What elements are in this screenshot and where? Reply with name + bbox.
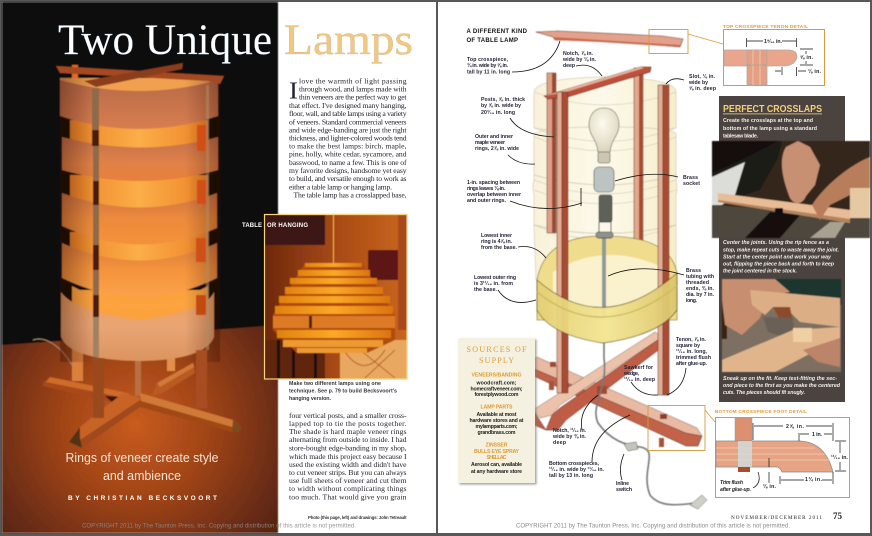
mortises (550, 362, 556, 367)
caption: Make two different lamps using one (289, 381, 381, 387)
panel: sources of supply: ZINSSER (486, 443, 508, 449)
detail: bottom crosspiece foot: 1¾ in. (805, 476, 823, 483)
drawing callouts: Inline (616, 481, 629, 487)
right page (438, 2, 870, 533)
panel: perfect crosslaps: ond piece to the first as you make the centered (723, 383, 841, 389)
panel: sources of supply: grandbrass.com (478, 430, 516, 436)
panel: perfect crosslaps: tablesaw blade. (723, 134, 759, 140)
base arm A (530, 337, 665, 430)
body text column 2: lapped top to tie the posts together. (289, 419, 407, 428)
drawing callouts: Notch, ⅞ in. (563, 51, 594, 57)
panel: perfect crosslaps: cuts. The pieces should fit snugly. (723, 390, 806, 396)
drawing callouts: Slot, ⅛ in. (689, 74, 716, 80)
top crosspiece (72, 65, 78, 80)
intro text column: and wide edge-banding are just the right (289, 126, 407, 134)
caption: hanging version. (289, 396, 332, 402)
intro text column: thin veneers are the perfect way to get (299, 92, 407, 102)
intro text column: to make the best lamps: birch, maple, (289, 142, 407, 150)
subtitle (66, 450, 218, 483)
detail: bottom crosspiece foot: 2⅝ in. (786, 424, 805, 430)
base cross (43, 377, 123, 402)
cord and plug (596, 343, 695, 505)
caption (289, 381, 397, 402)
body text column 2: four vertical posts, and a smaller cross- (289, 411, 407, 420)
drawing callouts: trimmed flush (676, 355, 711, 361)
intro text column: my favorite designs, handsome yet easy (289, 166, 407, 175)
body text column 2: used the existing width and didn't have (289, 460, 407, 469)
body text column 2: alternating from outside to inside. I had (289, 435, 407, 444)
folio: NOVEMBER/DECEMBER 2011 (731, 515, 822, 521)
drawing callouts: switch (616, 487, 632, 493)
drawing callouts: dia. by 7 in. (686, 292, 715, 298)
panel: sources of supply (458, 338, 535, 483)
intro text column: through wood, and lamps made with (299, 84, 407, 94)
panel: sources of supply: mylampparts.com; (476, 424, 518, 430)
drawing callouts: Outer and inner (475, 134, 513, 140)
drawing callouts: long. (686, 298, 698, 304)
leader arrows (498, 41, 686, 480)
inset photo: hanging lamp (242, 214, 407, 379)
drawing callouts: threaded (686, 280, 709, 286)
exploded top crosspiece (536, 31, 683, 47)
drawing callouts: Brass (686, 268, 701, 274)
intro text column: The table lamp has a crosslapped base, (294, 190, 407, 200)
intro text column: basswood, to name a few. This is one of (289, 158, 407, 167)
panel: sources of supply: BULLS EYE SPRAY (474, 449, 520, 455)
photo credit: Photo (this page, left) and drawings: John Tetreault (308, 515, 407, 520)
panel: perfect crosslaps: stop, make repeat cuts to waste away the joint. (723, 248, 840, 254)
body text column 2: too much. That would give you grain (289, 492, 407, 502)
byline: BY CHRISTIAN BECKSVOORT (68, 495, 217, 502)
lamp glow interiors (70, 120, 208, 152)
title: Two Unique (58, 17, 272, 64)
inset photo: hanging lamp: OR HANGING (267, 223, 308, 229)
subtitle: and ambience (103, 468, 181, 483)
assembled top crosspiece (544, 67, 651, 99)
body text column 2: store-bought edge-banding in my shop, (289, 444, 407, 452)
detail: bottom crosspiece foot: ⅛ in. (763, 484, 777, 490)
drawing callouts: ends, ⅜ in. (686, 286, 715, 292)
panel: perfect crosslaps: PERFECT CROSSLAPS (723, 103, 822, 115)
intro text column: either a table lamp or hanging lamp. (289, 182, 392, 192)
drawing callouts: wedge, (623, 371, 640, 377)
panel: perfect crosslaps: Center the joints. Using the rip fence as a (723, 240, 829, 246)
detail: bottom crosspiece foot: ¹¹⁄₁₆ in. (831, 455, 849, 461)
panel: sources of supply: Aerosol can, available (471, 462, 522, 468)
drawing callouts: ¹¹⁄₁₆ in. deep (624, 377, 655, 383)
drawing callouts: ¾ in. wide by ⅝ in. (467, 62, 509, 69)
body text column 2: to cut veneer strips. But you can always (289, 468, 407, 477)
drawing callouts: Lowest outer ring (474, 275, 516, 281)
panel: sources of supply: SHELLAC (486, 455, 507, 461)
body text column 2: to width without complicating things (289, 484, 407, 493)
exploded lamp drawing (525, 31, 707, 509)
drawing callouts: Lowest inner (481, 233, 512, 239)
panel: sources of supply: at any hardware store (471, 469, 522, 475)
drawing callouts: wide by (688, 80, 708, 86)
crosspiece bars (56, 66, 224, 84)
heading: a different kind of table lamp: A DIFFERENT KIND (466, 29, 528, 35)
panel: sources of supply: forestplywood.com (474, 392, 519, 398)
body text column 2 (289, 411, 407, 502)
back legs (72, 345, 83, 381)
veneer rings (60, 80, 218, 129)
drawing callouts: rings, 2⅞ in. wide (475, 146, 519, 152)
drawing callouts: wide by ⅜ in. (552, 434, 587, 440)
intro text column: floor, wall, and table lamps using a variety (289, 109, 407, 118)
heading: a different kind of table lamp: OF TABLE LAMP (466, 38, 518, 44)
panel: perfect crosslaps: bottom of the lamp using a standard (723, 126, 817, 132)
panel: sources of supply: LAMP PARTS (480, 405, 513, 411)
inset label: TABLE (242, 223, 262, 229)
heading: a different kind of table lamp (466, 29, 528, 44)
copyright right: COPYRIGHT 2011 by The Taunton Press, Inc. Copying and distribution of this article is not permitted. (516, 524, 790, 530)
panel: sources of supply: woodcraft.com; (476, 380, 517, 386)
drawing callouts: tubing with (686, 274, 714, 280)
shade rings (533, 77, 677, 290)
copyright left: COPYRIGHT 2011 by The Taunton Press, Inc. Copying and distribution of this article is not permitted. (82, 524, 356, 530)
drawing callouts: ring is 4⅞ in. (481, 239, 513, 245)
photo: fitting the joint (722, 279, 841, 372)
panel: perfect crosslaps: the joint centered in the stock. (723, 268, 798, 274)
folio (731, 511, 842, 521)
drawing callouts: ⅝ in. deep (689, 86, 716, 92)
intro text column: that effect. I've designed many hanging, (289, 101, 407, 110)
intro text column: of veneers. Standard commercial veneers (289, 118, 407, 126)
drawing callouts (467, 51, 716, 493)
bulb (589, 108, 619, 163)
panel: perfect crosslaps: out, flipping the piece back and forth to keep (723, 262, 835, 268)
front posts (92, 88, 99, 132)
drawing callouts: deep (553, 440, 566, 446)
drawing callouts: deep (563, 63, 575, 69)
drawing callouts: 1-in. spacing between (467, 180, 520, 186)
caption: technique. See p. 79 to build Becksvoort's (289, 388, 397, 394)
drawing callouts: tall by 13 in. long (549, 473, 593, 479)
drawing callouts: ¹¹⁄₁₆ in. wide by ¹¹⁄₁₆ in. (549, 467, 605, 473)
intro text column: pine, holly, white cedar, sycamore, and (289, 150, 407, 158)
drawing callouts: maple veneer (475, 140, 505, 146)
front posts (557, 92, 562, 393)
drawing callouts: the base. (474, 287, 498, 293)
photo: hands at tablesaw (712, 141, 870, 238)
body text column 2: which made this project easy because I (289, 452, 407, 461)
photo: table lamp on table (2, 2, 278, 533)
drawing callouts: 20³⁄₁₆ in. long (481, 110, 515, 116)
drawing callouts: ¹¹⁄₁₆ in. long, (676, 349, 708, 355)
detail: bottom crosspiece foot: after glue-up. (720, 487, 751, 493)
intro text column: love the warmth of light passing (299, 76, 407, 86)
detail: bottom crosspiece foot: Trim flush (720, 480, 743, 486)
drawing callouts: Bottom crosspieces, (549, 461, 600, 467)
title (58, 17, 413, 64)
intro text column: thickness, and lighter-colored woods tend (289, 134, 407, 142)
lower inner ring (537, 236, 677, 320)
intro text column: to build, and versatile enough to work as (289, 174, 407, 183)
panel: sources of supply: Available at most (476, 412, 517, 418)
drawing callouts: wide by ⅛ in. (562, 57, 597, 63)
panel: sources of supply: SUPPLY (479, 356, 514, 365)
drawing callouts: square by (676, 343, 700, 349)
panel: perfect crosslaps (712, 96, 870, 402)
panel: sources of supply: SOURCES OF (466, 345, 527, 354)
drawing callouts: after glue-up. (676, 361, 708, 367)
drawing callouts: overlap between inner (467, 192, 521, 198)
detail: top crosspiece tenon (649, 24, 824, 86)
detail: top crosspiece tenon: 1⁹⁄₁₆ in. (764, 39, 783, 45)
detail: bottom crosspiece foot: BOTTOM CROSSPIECE FOOT DETAIL (715, 409, 807, 415)
detail: top crosspiece tenon: TOP CROSSPIECE TENON DETAIL (723, 24, 808, 30)
body text column 2: use full sheets of veneer and cut them (289, 476, 407, 485)
drawing callouts: socket (683, 181, 700, 187)
back posts (547, 73, 556, 233)
drawing callouts: rings leaves ⅛-in. (467, 186, 506, 192)
subtitle: Rings of veneer create style (66, 450, 218, 465)
detail: top crosspiece tenon: ⅝ in. (800, 55, 814, 61)
detail: top crosspiece tenon: ⅛ in. (808, 69, 822, 75)
base arm B (525, 365, 702, 446)
front yellow band (537, 273, 677, 343)
drawing callouts: Notch, ¹¹⁄₁₆ in. (553, 428, 587, 434)
drawing callouts: Tenon, ⅞ in. (676, 337, 707, 343)
panel: sources of supply: VENEERS/BANDING (472, 373, 522, 379)
drawing callouts: Sawkerf for (624, 365, 653, 371)
drawing callouts: from the base. (481, 245, 518, 251)
panel: sources of supply: hardware stores and at (470, 418, 524, 424)
left page (2, 2, 436, 533)
drawing callouts: by ⅝ in. wide by (481, 103, 521, 109)
detail: bottom crosspiece foot (648, 406, 850, 498)
drawing callouts: and outer rings. (467, 198, 507, 204)
folio: 75 (833, 511, 842, 521)
drawing callouts: Top crosspiece, (467, 57, 509, 63)
panel: perfect crosslaps: Sneak up on the fit. Keep test-fitting the sec- (723, 376, 837, 382)
panel: sources of supply: homecraftveneer.com; (470, 386, 523, 392)
panel: perfect crosslaps: Create the crosslaps at the top and (723, 118, 813, 124)
socket (594, 167, 614, 192)
panel: perfect crosslaps: Start at the center point and work your way (723, 254, 832, 260)
title: Lamps (284, 17, 413, 64)
body text column 2: The shade is hard maple veneer rings (289, 427, 407, 436)
drawing callouts: is 3¹¹⁄₁₆ in. from (474, 281, 513, 287)
intro text column (289, 76, 407, 200)
drop cap: I (289, 78, 298, 104)
detail: bottom crosspiece foot: 1 in. (812, 432, 823, 438)
drawing callouts: Brass (683, 175, 698, 181)
drawing callouts: Posts, ⅝ in. thick (481, 97, 525, 103)
drawing callouts: tall by 11 in. long (467, 70, 510, 76)
